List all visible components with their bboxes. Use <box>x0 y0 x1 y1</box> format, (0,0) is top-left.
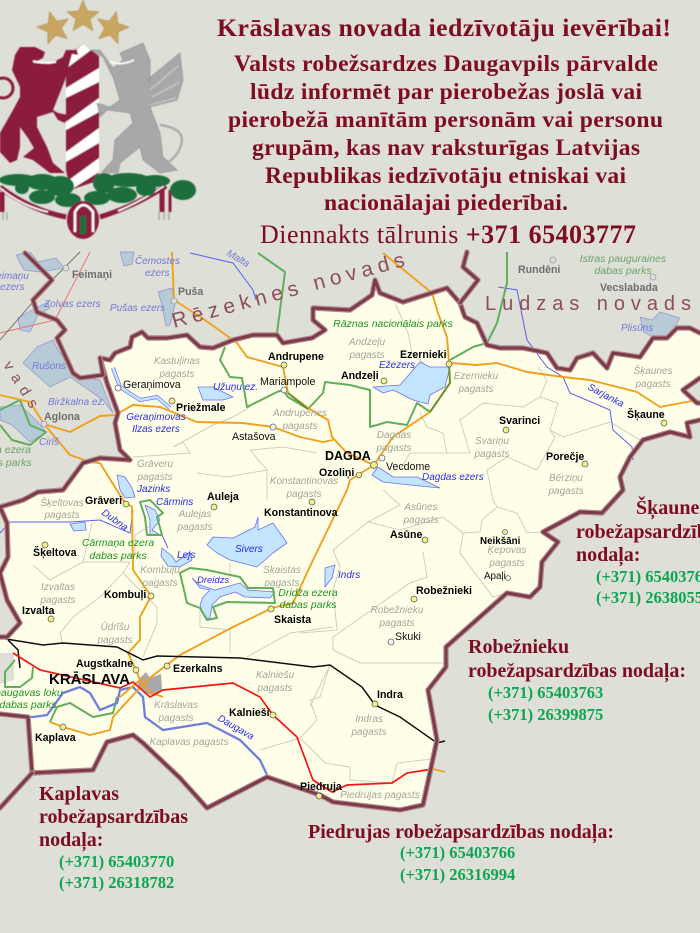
parish names: Krāslavas <box>154 700 198 711</box>
parish names: pagasts <box>39 595 76 606</box>
parish names: Kastuļinas <box>154 356 200 367</box>
settlements: Neikšāni <box>480 536 521 547</box>
lake and river names: Sivers <box>235 544 263 555</box>
settlements: Indra <box>377 689 403 701</box>
settlements <box>22 349 667 799</box>
lake and river names: ezers <box>0 282 24 293</box>
lake and river names: Ežezers <box>379 360 415 371</box>
settlements: Asūne <box>390 529 422 541</box>
settlements: Robežnieki <box>416 585 472 597</box>
lake and river names: Ilzas ezers <box>132 424 180 435</box>
railway <box>0 638 445 743</box>
settlements: Ezernieki <box>400 349 447 361</box>
lake and river names: Dreidzs <box>197 575 229 586</box>
lake and river names: Zolvas ezers <box>43 299 101 310</box>
settlements: Geraņimova <box>123 379 181 391</box>
parish names: Asūnes <box>403 502 438 513</box>
parish names: Andrupenes <box>272 408 327 419</box>
lake and river names: Dubna <box>99 507 130 534</box>
settlements: Kombuļi <box>104 589 146 601</box>
settlements: Skuki <box>395 631 421 643</box>
municipality area fill <box>0 280 700 810</box>
icon: ribbon knot <box>67 201 99 239</box>
lake and river names: ezers <box>145 268 169 279</box>
Šķaune office contact: (+371) 6540376 <box>596 567 700 586</box>
main notice text: nacionālajai piederībai. <box>324 190 568 216</box>
parish names: pagasts <box>176 522 213 533</box>
lake and river names: Cirīš <box>39 437 59 448</box>
parish names: Ūdrīšu <box>101 621 130 633</box>
parish names: Aulejas <box>178 509 211 520</box>
Kaplava office contact: (+371) 65403770 <box>59 852 174 871</box>
settlements: Astašova <box>232 431 276 443</box>
lake and river names <box>0 248 653 743</box>
outside settlements: Vecslabada <box>600 282 658 294</box>
icon: three stars <box>34 0 132 46</box>
parish names: pagasts <box>402 515 439 526</box>
parish names: Izvaltas <box>41 582 75 593</box>
lake and river names: Indrs <box>338 570 360 581</box>
parish names: Šķaunes <box>634 364 672 377</box>
parish names: pagasts <box>378 618 415 629</box>
settlements: Konstantinova <box>264 507 338 519</box>
parish names: pagasts <box>350 727 387 738</box>
parish names: Ezernieku <box>454 371 499 382</box>
main notice text: lūdz informēt par pierobežas joslā vai <box>250 79 642 105</box>
lakes <box>70 362 450 618</box>
settlements: KRĀSLAVA <box>49 671 130 688</box>
icon: silver griffin <box>92 43 183 173</box>
nature park names: Rāznas nacionālais parks <box>333 318 454 330</box>
settlements: Mariampole <box>260 376 315 388</box>
nature park names: dabas parks <box>279 599 337 611</box>
settlements: Šķaune <box>627 408 665 421</box>
parish names: Konstantinovas <box>270 476 338 487</box>
parish names: Dagdas <box>377 430 411 441</box>
parish names: pagasts <box>285 489 322 500</box>
parish names: pagasts <box>634 379 671 390</box>
municipality border <box>0 280 700 810</box>
outside settlements: Aglona <box>44 411 80 423</box>
parish names: pagasts <box>281 421 318 432</box>
lake and river names: Cārmins <box>156 497 193 508</box>
parish names: pagasts <box>157 713 194 724</box>
parish names: Kalniešu <box>256 670 295 681</box>
Kaplava office contact: nodaļa: <box>39 829 103 852</box>
nature park names: Dridža ezera <box>278 587 338 599</box>
parish names: Kombuļu <box>140 565 180 576</box>
settlements: DAGDA <box>325 449 371 463</box>
icon: striped pillar <box>66 44 99 190</box>
settlements: Šķeltova <box>33 546 77 559</box>
settlements: Andzeļi <box>341 370 379 382</box>
Šķaune office contact <box>576 495 700 607</box>
settlements: Vecdome <box>386 461 430 473</box>
parish names: Bērziņu <box>549 473 583 484</box>
nature park names: Cārmaņa ezera <box>82 537 154 549</box>
Piedruja office contact: (+371) 65403766 <box>400 843 515 862</box>
parish names: pagasts <box>473 449 510 460</box>
nature park boundaries <box>0 252 507 722</box>
parish names: pagasts <box>96 635 133 646</box>
nature park names: dabas parks <box>89 550 147 562</box>
outside settlements <box>41 257 658 427</box>
settlements: Svarinci <box>499 415 540 427</box>
Šķaune office contact: nodaļa: <box>576 544 640 567</box>
icon: ribbon drapes <box>0 186 170 220</box>
main notice text: Valsts robežsardzes Daugavpils pārvalde <box>234 51 658 77</box>
nature park names: dabas parks <box>0 699 57 711</box>
parish names: pagasts <box>348 350 385 361</box>
lake and river names: Biržkalna ez. <box>48 397 105 408</box>
Kaplava office contact: robežapsardzības <box>39 806 188 828</box>
parish names: pagasts <box>43 510 80 521</box>
heading: Krāslavas novada iedzīvotāju ievērībai! <box>217 13 671 42</box>
map of Krāslava municipality <box>0 248 700 810</box>
main notice text <box>228 51 663 216</box>
Robežnieki office contact: robežapsardzības nodaļa: <box>468 660 686 683</box>
parish names: Robežnieku <box>371 605 424 616</box>
settlements: Porečje <box>546 451 584 463</box>
parish names: pagasts <box>158 369 195 380</box>
parish names: Ķepovas <box>488 545 526 556</box>
parish names: Skaistas <box>263 565 301 576</box>
parish names: Andzeļu <box>348 337 386 348</box>
Kaplava office contact: Kaplavas <box>39 783 119 805</box>
nature park names: Istras pauguraines <box>580 253 667 265</box>
Piedruja office contact: (+371) 26316994 <box>400 865 515 884</box>
Robežnieki office contact <box>468 636 686 724</box>
grey outlying lakes <box>0 252 680 442</box>
parish names: pagasts <box>256 683 293 694</box>
parish names: Indras <box>355 714 383 725</box>
parish names: pagasts <box>488 558 525 569</box>
icon: red lion <box>0 47 78 173</box>
Kaplava office contact: (+371) 26318782 <box>59 873 174 892</box>
Piedruja office contact <box>308 821 614 884</box>
parish names: pagasts <box>547 486 584 497</box>
lake and river names: Čemostes <box>135 254 180 267</box>
main notice text: grupām, kas nav raksturīgas Latvijas <box>252 135 640 161</box>
parish names: pagasts <box>136 472 173 483</box>
parish names: Svariņu <box>475 436 509 447</box>
large municipality names: Rēzeknes novads <box>169 248 407 333</box>
parish names: Kaplavas pagasts <box>150 737 228 748</box>
settlements: Augstkalne <box>76 658 133 670</box>
parish names: pagasts <box>141 578 178 589</box>
Robežnieki office contact: (+371) 26399875 <box>488 705 603 724</box>
parish names: pagasts <box>457 384 494 395</box>
large municipality names: Ludzas novads <box>485 293 691 315</box>
outside settlements: Feimaņi <box>72 269 112 281</box>
large municipality names: vads <box>0 358 42 411</box>
Robežnieki office contact: Robežnieku <box>468 636 569 658</box>
settlements: Ozoliņi <box>319 467 354 479</box>
parish names: pagasts <box>375 443 412 454</box>
parish names: Grāveru <box>137 459 173 470</box>
main notice text: pierobežā manītām personām vai personu <box>228 107 663 133</box>
lake and river names: Malta <box>224 248 252 270</box>
nature park names: dabas parks <box>594 265 652 277</box>
settlements: Priežmale <box>176 402 226 414</box>
lake and river names: Dagdas ezers <box>422 472 484 483</box>
Šķaune office contact: (+371) 2638055 <box>596 588 700 607</box>
settlements: Izvalta <box>22 605 54 617</box>
nature park names <box>0 253 667 711</box>
parish names: Piedrujas pagasts <box>340 790 420 801</box>
parish names: Šķeltovas <box>40 496 84 509</box>
settlements: Andrupene <box>268 351 324 363</box>
River Daugava <box>0 687 268 777</box>
settlements: Kaplava <box>35 732 76 744</box>
large municipality names <box>0 248 691 411</box>
lake and river names: Užuņu ez. <box>213 382 258 393</box>
settlements: Ezerkalns <box>173 663 223 675</box>
lake and river names: Jazinks <box>136 484 170 495</box>
outside settlements: Puša <box>178 286 203 298</box>
town area of Krāslava <box>138 672 162 696</box>
lake and river names: Daugava <box>216 713 256 743</box>
settlements: Auleja <box>207 491 239 503</box>
rivers <box>0 253 633 548</box>
lake and river names: Sarjanka <box>586 382 626 410</box>
Piedruja office contact: Piedrujas robežapsardzības nodaļa: <box>308 821 614 844</box>
settlements: Kalnieši <box>229 707 270 719</box>
lake and river names: Lejs <box>177 550 195 561</box>
outside settlements: Rundēni <box>518 264 560 276</box>
coat of arms of Latvia <box>0 0 196 239</box>
lake and river names: Rušons <box>32 361 66 372</box>
settlements: Skaista <box>274 614 311 626</box>
border of neighbouring municipalities <box>0 252 478 808</box>
settlements: Piedruja <box>300 781 342 793</box>
settlements: Apaļi <box>484 571 506 582</box>
main notice text: Republikas iedzīvotāju etniskai vai <box>265 163 626 189</box>
icon: oak wreath <box>0 173 196 207</box>
Robežnieki office contact: (+371) 65403763 <box>488 683 603 702</box>
24-hour telephone: Diennakts tālrunis +371 65403777 <box>260 220 636 249</box>
lake and river names: Pušas ezers <box>110 303 165 314</box>
roads <box>0 252 697 772</box>
parish names <box>39 337 672 801</box>
main red road <box>13 653 433 792</box>
lake and river names: Plisūns <box>621 323 653 334</box>
pagasts boundaries <box>33 303 640 783</box>
settlements: Grāveri <box>85 495 122 507</box>
thin outer lines beyond municipality <box>0 252 90 333</box>
parish names: pagasts <box>263 578 300 589</box>
lake and river names: Geraņimovas <box>126 412 186 423</box>
Kaplava office contact <box>39 783 188 892</box>
